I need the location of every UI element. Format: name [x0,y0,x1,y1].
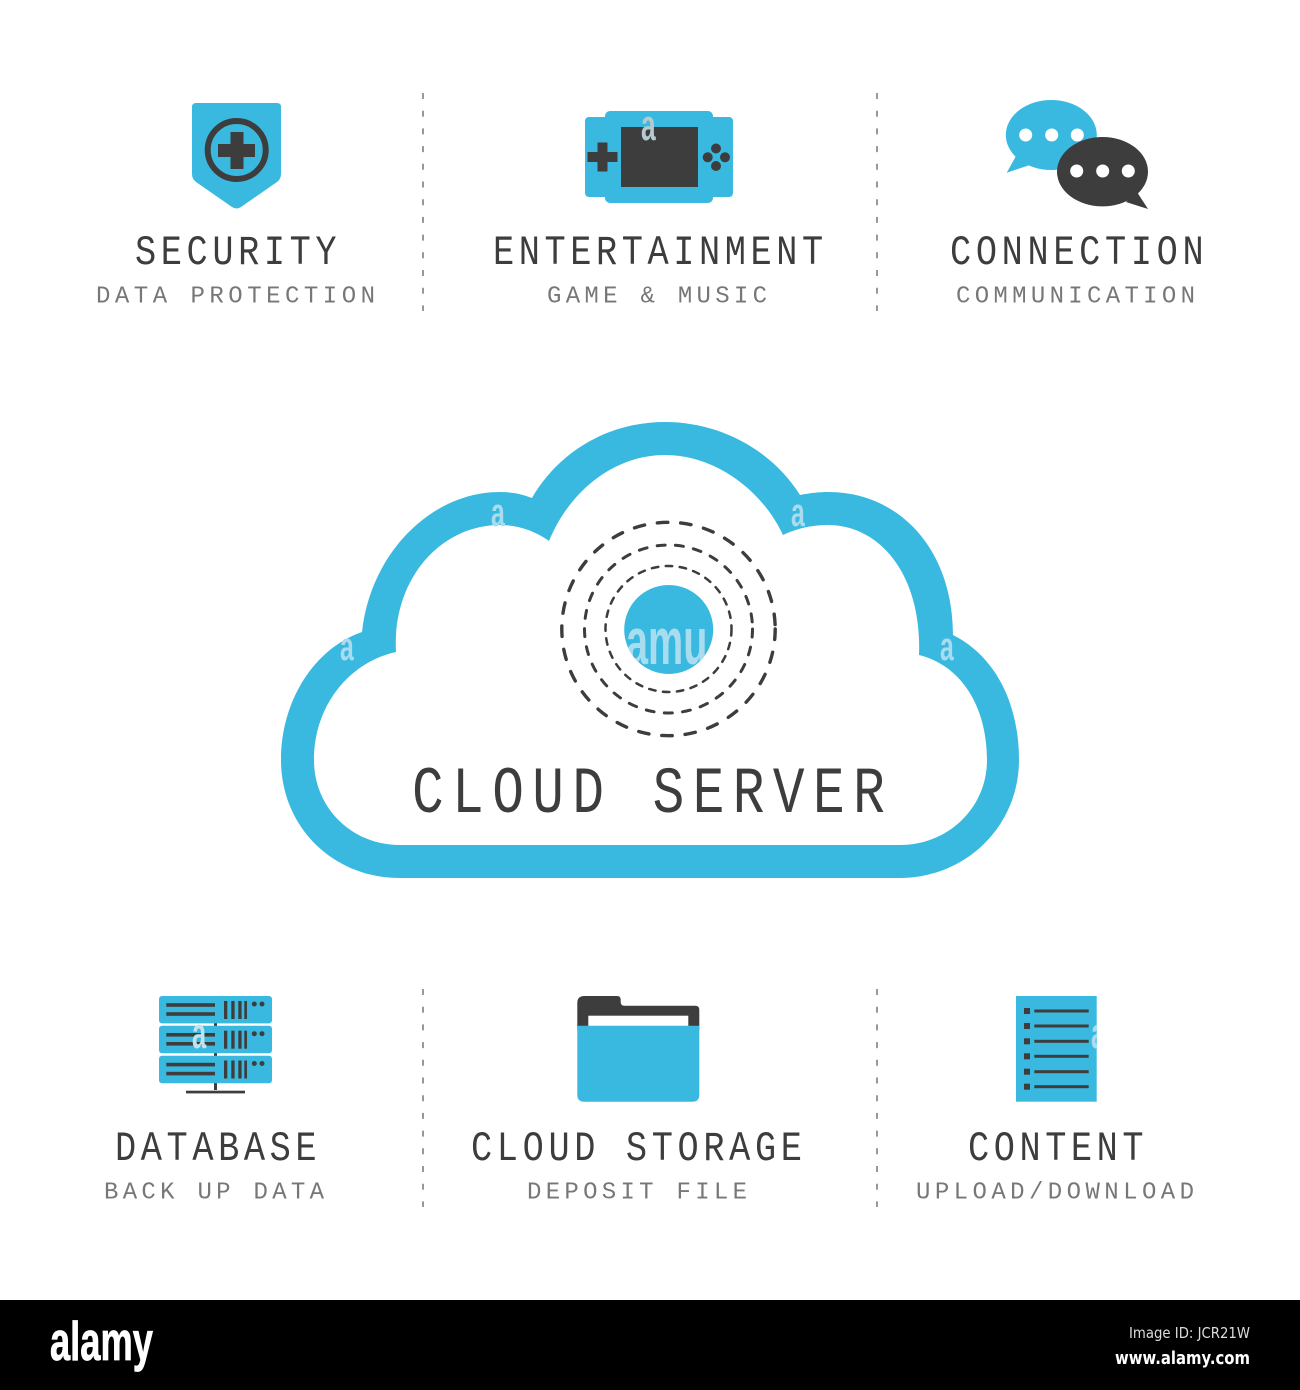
subheading: communication: COMMUNICATION [956,284,1195,310]
watermark marks: a [641,100,656,150]
subheading: game and music: GAME & MUSIC [547,284,767,310]
watermark marks [192,100,1106,1058]
watermark marks: a [791,491,805,536]
watermark marks: a [192,1008,207,1058]
panel: security [96,103,375,310]
icon: cloud outline [281,422,1019,878]
panel: content [916,996,1194,1206]
footer website: www.alamy.com [1115,1348,1250,1369]
subheading: back up data: BACK UP DATA [104,1180,325,1206]
watermark marks: a [340,625,354,670]
icon: concentric dashed signal rings [562,522,775,736]
icon: speech bubbles [1006,100,1148,209]
footer image id: Image ID: JCR21W [1129,1324,1250,1342]
watermark marks: a [940,625,954,670]
watermark marks: lamu [615,605,707,679]
footer logo: alamy [50,1310,153,1372]
panel: cloud storage [471,996,802,1206]
icon: handheld game console [585,111,733,203]
panel: connection [950,100,1204,310]
watermark marks: a [491,491,505,536]
heading: security: SECURITY [135,229,337,277]
subheading: deposit file: DEPOSIT FILE [527,1180,747,1206]
icon: shield with plus [192,103,281,208]
divider lines [423,93,877,1207]
watermark marks: a [1091,1008,1106,1058]
subheading: upload / download: UPLOAD/DOWNLOAD [916,1180,1194,1206]
heading: cloud storage: CLOUD STORAGE [471,1125,802,1173]
icon: document list [1016,996,1097,1102]
heading: content: CONTENT [968,1125,1144,1173]
subheading: data protection: DATA PROTECTION [96,284,375,310]
footer bar [0,1300,1300,1390]
panel: cloud server [281,422,1019,878]
icon: folder [577,996,699,1102]
heading: connection: CONNECTION [950,229,1204,277]
heading: cloud server: CLOUD SERVER [412,757,885,832]
panel: entertainment [493,111,823,310]
icon: server rack [159,996,272,1093]
heading: entertainment: ENTERTAINMENT [493,229,823,277]
panel: database [104,996,325,1206]
heading: database: DATABASE [115,1125,317,1173]
